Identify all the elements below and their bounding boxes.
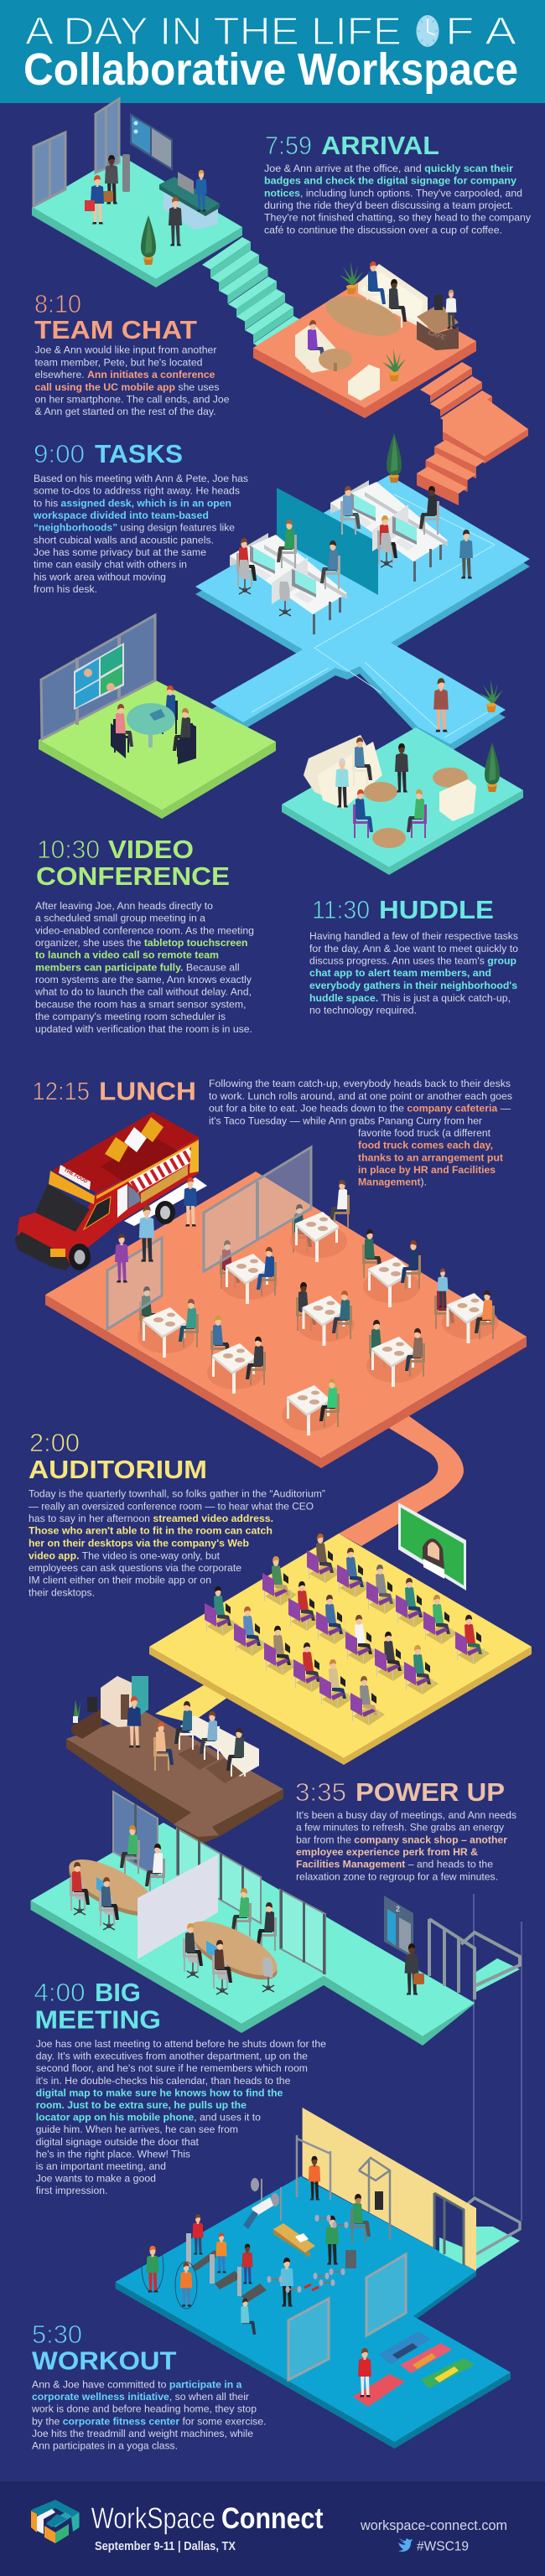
text block: auditorium: Today is the quarterly townhall, so folks gather in the “Auditorium”	[29, 1488, 325, 1500]
door frames	[429, 1919, 520, 1999]
heading: 10:30 Video Conference: VIDEO	[108, 835, 194, 864]
text block: video conference: organizer, she uses the tabletop touchscreen	[35, 937, 248, 949]
heading: 11:30 Huddle	[312, 895, 494, 924]
heading: 9:00 Tasks: TASKS	[95, 439, 183, 468]
text block: huddle: discuss progress. Ann uses the team's group	[309, 955, 516, 967]
text block: video conference: what to do to launch the call without delay. And,	[34, 986, 252, 998]
awning stripes	[128, 1146, 199, 1192]
truck side body	[63, 1137, 199, 1251]
pull-up bar and athlete	[297, 2135, 330, 2200]
text block: auditorium: has to say in her afternoon streamed video address.	[29, 1513, 273, 1524]
text block: video conference: video-enabled conference room. As the meeting	[35, 924, 254, 936]
text block: workout: Joe hits the treadmill and weight machines, while	[32, 2428, 253, 2439]
dividing partition	[138, 1854, 218, 1959]
white door	[117, 1184, 127, 1218]
text block: video conference: room systems are the same, Ann knows exactly	[35, 974, 252, 985]
cafe counter	[417, 290, 459, 350]
huddle scene: mint floor	[282, 727, 523, 875]
heading: 3:35 Power Up: 3:35	[295, 1777, 346, 1807]
wordmark: WorkSpace	[91, 2502, 215, 2535]
title line: A Day in the Life of a	[25, 9, 516, 53]
text block: big meeting: it's in. He double-checks his calendar, than heads to the	[36, 2075, 291, 2087]
text block: big meeting: he's in the right place. Whew! This	[36, 2148, 190, 2160]
text block: arrival: Joe & Ann arrive at the office, and quickly scan their	[264, 163, 513, 174]
text block: big meeting: guide him. When he arrives, he can see from	[36, 2123, 238, 2135]
text block: power up	[296, 1809, 516, 1882]
truck roof	[52, 1112, 199, 1192]
icon: clock as O	[416, 15, 439, 47]
text block: big meeting: Joe wants to make a good	[36, 2173, 156, 2185]
roof vents	[105, 1137, 128, 1162]
heading: 11:30 Huddle: 11:30	[312, 895, 370, 924]
text block: big meeting: second floor, and he's not sure if he remembers which room	[36, 2062, 308, 2074]
heading: 10:30 Video Conference: 10:30	[37, 835, 100, 864]
text block: workout: Ann & Joe have committed to participate in a	[32, 2378, 242, 2390]
text block: power up: a few minutes to refresh. She grabs an energy	[296, 1822, 505, 1834]
text block: lunch: Following the team catch-up, everybody heads back to their desks	[209, 1078, 511, 1089]
text block: video conference: to launch a video call so remote team	[35, 949, 219, 961]
text block: team chat	[35, 344, 230, 417]
text block: tasks: short cubical walls and acoustic panels.	[34, 534, 214, 546]
text block: video conference: After leaving Joe, Ann heads directly to	[35, 900, 213, 912]
text block: team chat: Joe & Ann would like input from another	[35, 344, 216, 356]
text block: lunch: food truck comes each day,	[358, 1140, 493, 1151]
wheels	[69, 1244, 91, 1270]
text block: tasks: Based on his meeting with Ann & Pete, Joe has	[34, 473, 248, 484]
text block: big meeting: is an important meeting, and	[36, 2160, 166, 2172]
text block: lunch: out for a bite to eat. Joe heads down to the company cafeteria —	[209, 1103, 511, 1115]
people at food truck	[115, 1177, 197, 1282]
text block: big meeting: room. Just to be extra sure, he pulls up the	[36, 2099, 247, 2111]
text block: video conference: updated with verification that the room is in use.	[35, 1023, 252, 1035]
food truck	[14, 1112, 207, 1270]
plant	[141, 215, 156, 265]
text block: lunch: it's Taco Tuesday — while Ann grabs Panang Curry from her	[209, 1115, 482, 1126]
heading: 5:30 Workout	[32, 2320, 177, 2376]
text block: auditorium: — really an oversized conference room — to hear what the CEO	[29, 1500, 314, 1512]
glass walls	[107, 1147, 311, 1329]
text block: team chat: & Ann get started on the rest of the day.	[35, 406, 216, 417]
text block: team chat: team member, Pete, but he's located	[35, 357, 203, 369]
heading: 5:30 Workout: 5:30	[32, 2320, 82, 2349]
service counter	[124, 1177, 207, 1226]
icon: WorkSpace Connect logo	[31, 2500, 79, 2543]
plant on corridor	[480, 680, 503, 712]
windshield	[35, 1184, 90, 1232]
presentation screen	[398, 1503, 466, 1591]
text block: arrival: notices, including lunch options. They've carpooled, and	[264, 187, 522, 199]
rear yellow panel	[189, 1141, 199, 1173]
text block: big meeting	[36, 2038, 326, 2196]
meeting people	[113, 704, 133, 753]
heading: 9:00 Tasks: 9:00	[34, 439, 85, 468]
oval coffee table	[321, 288, 405, 344]
walking woman	[433, 678, 449, 732]
text block: workout	[31, 2378, 266, 2452]
bench press	[243, 2178, 281, 2229]
beyond-door floor	[475, 1958, 520, 1993]
orange connecting path	[339, 1410, 464, 1546]
glass panels	[288, 2254, 406, 2380]
hood and front	[17, 1213, 75, 1249]
text block: power up: bar from the company snack shop – another	[296, 1834, 507, 1845]
text block: lunch: thanks to an arrangement put	[358, 1151, 503, 1163]
title line: A Day in the Life of a: A DAY IN THE LIFE	[25, 9, 402, 53]
video conference scene: green floor	[39, 615, 276, 819]
icon: twitter bird	[398, 2538, 413, 2552]
heading: 4:00 Big Meeting: MEETING	[35, 2005, 161, 2035]
text block: arrival: badges and check the digital signage for company	[264, 175, 516, 187]
plant	[485, 742, 500, 792]
text block: huddle: everybody gathers in their neighborhood's	[309, 980, 517, 991]
hashtag: #WSC19	[417, 2539, 469, 2554]
text block: auditorium: video app. The video is one-way only, but	[29, 1549, 221, 1561]
elevator shaft lines	[474, 1894, 522, 2221]
fridge and vending machine	[101, 1676, 148, 1727]
text block: big meeting: locator app on his mobile phone, and uses it to	[36, 2112, 261, 2123]
text block: video conference: the company's meeting room scheduler is	[35, 1011, 226, 1022]
beyond-door floor	[466, 2227, 520, 2269]
weight machine and athlete	[350, 2158, 390, 2242]
text block: auditorium: her on their desktops via the company's Web	[29, 1538, 249, 1549]
heading: 2:00 Auditorium: AUDITORIUM	[29, 1455, 207, 1484]
text block: arrival	[264, 163, 532, 235]
stairs down to cafe	[202, 237, 302, 357]
glass table	[127, 703, 175, 747]
heading: 8:10 Team Chat: TEAM CHAT	[34, 315, 197, 344]
second-floor sign: 2	[396, 1905, 400, 1913]
booth tables	[178, 1745, 243, 1783]
teal divider wall	[277, 488, 378, 595]
text block: power up: employee experience perk from HR &	[296, 1846, 478, 1858]
heading: 2:00 Auditorium	[29, 1428, 207, 1484]
text block: huddle: chat app to alert team members, and	[309, 967, 491, 979]
plant	[387, 433, 402, 483]
meeting table A with people	[62, 1825, 165, 1930]
header banner	[0, 0, 545, 103]
big meeting scene: mint floor	[30, 1792, 520, 2046]
door window	[84, 1197, 111, 1229]
footer band	[0, 2481, 545, 2576]
armchair	[439, 779, 476, 821]
huddle people	[335, 737, 427, 838]
cab yellow band and sign	[49, 1171, 95, 1204]
text block: tasks: Joe has some privacy but at the same	[34, 546, 206, 558]
yoga mats and people	[353, 2331, 475, 2407]
text block: auditorium: Those who aren't able to fit in the room can catch	[29, 1525, 272, 1537]
heading: 10:30 Video Conference	[36, 835, 230, 891]
text block: tasks: workspace divided into team-based	[33, 510, 209, 521]
text block: huddle	[309, 930, 518, 1016]
cardio machines	[186, 2214, 267, 2303]
text block: big meeting: first impression.	[36, 2185, 108, 2196]
text block: video conference: a scheduled small group meeting in a	[35, 913, 205, 924]
audience seats	[205, 1534, 490, 1725]
text block: huddle: Having handled a few of their respective tasks	[309, 930, 518, 942]
text block: video conference: members can participate fully. Because all	[35, 961, 240, 973]
text block: huddle: huddle space. This is just a quick catch-up,	[309, 992, 511, 1004]
sofa with two people	[358, 261, 428, 331]
text block: video conference: because the room has a smart sensor system,	[35, 998, 247, 1010]
text block: big meeting: day. It's with executives from another department, up on the	[36, 2051, 308, 2062]
heading: 7:59 Arrival: ARRIVAL	[321, 131, 439, 160]
text block: tasks	[33, 473, 248, 595]
snack counter	[71, 1697, 102, 1739]
reception desk	[159, 170, 220, 246]
heading: 3:35 Power Up	[295, 1777, 505, 1807]
text block: tasks: to his assigned desk, which is in an open	[34, 497, 231, 509]
text block: huddle: for the day, Ann & Joe want to meet quickly to	[309, 943, 518, 954]
text block: auditorium: their desktops.	[29, 1586, 95, 1598]
wordmark	[91, 2502, 324, 2535]
glass walls	[113, 1792, 325, 1974]
text block: arrival: They're not finished chatting, so they head to the company	[264, 212, 532, 224]
heading: 7:59 Arrival	[265, 131, 439, 160]
cream couch	[304, 735, 382, 809]
text block: workout: work is done and before heading home, they stop	[31, 2403, 257, 2415]
heading: 12:15 Lunch: 12:15	[32, 1077, 90, 1106]
armchairs with woman	[295, 320, 406, 401]
text block: team chat: call using the UC mobile app she uses	[35, 381, 220, 393]
heading: 9:00 Tasks	[34, 439, 183, 468]
food truck: THE FOOD	[63, 1168, 89, 1185]
text block: power up: Facilities Management – and heads to the	[296, 1859, 493, 1870]
text block: power up: It's been a busy day of meetings, and Ann needs	[296, 1809, 516, 1821]
plants	[340, 261, 363, 294]
conference chairs	[111, 722, 196, 764]
joe walking	[405, 1943, 424, 1995]
yellow corridor	[155, 1680, 233, 1723]
text block: arrival: café to continue the discussion over a cup of coffee.	[264, 224, 502, 235]
cafe scene: orange floor and stairs	[253, 261, 528, 505]
badge scanner post	[122, 154, 130, 192]
text block: tasks: “neighborhoods” using design features like	[34, 522, 235, 534]
heading: 10:30 Video Conference: CONFERENCE	[36, 861, 230, 891]
text block: lunch: to work. Lunch rolls around, and at one point or another each goes	[209, 1090, 512, 1102]
heading: 8:10 Team Chat	[34, 289, 197, 344]
website: workspace-connect.com	[360, 2517, 507, 2533]
coffee tables	[364, 768, 468, 848]
orange stair overlap	[417, 467, 467, 505]
wordmark: Connect	[221, 2502, 324, 2535]
text block: workout: Ann participates in a yoga class.	[32, 2440, 178, 2452]
ann	[158, 685, 178, 734]
snack people	[127, 1696, 247, 1777]
heading: 2:00 Auditorium: 2:00	[29, 1428, 80, 1457]
dumbbell rack	[304, 2250, 356, 2290]
text block: team chat: on her smartphone. The call ends, and Joe	[35, 394, 230, 406]
jump-rope athletes	[142, 2242, 197, 2309]
wooden bench	[273, 2223, 315, 2258]
event dates: September 9-11 | Dallas, TX	[95, 2539, 236, 2553]
heading: 7:59 Arrival: 7:59	[265, 131, 312, 160]
text block: lunch: Management).	[358, 1177, 427, 1188]
workout scene: blue gym floor	[116, 2108, 520, 2449]
dining tables and people	[138, 1180, 498, 1435]
text block: workout: corporate wellness initiative, so when all their	[32, 2391, 249, 2403]
text block: lunch: in place by HR and Facilities	[358, 1164, 496, 1176]
text block: lunch: favorite food truck (a different	[358, 1127, 491, 1139]
text block: auditorium: IM client either on their mobile app or on	[29, 1575, 211, 1586]
heading: 8:10 Team Chat: 8:10	[34, 289, 81, 318]
dumbbell athletes	[239, 2215, 349, 2340]
heading: 5:30 Workout: WORKOUT	[32, 2346, 177, 2376]
heading: 4:00 Big Meeting	[34, 1978, 161, 2035]
meeting table B with people	[182, 1888, 284, 1994]
text block: tasks: from his desk.	[34, 583, 97, 595]
door frames	[34, 99, 119, 206]
standing man	[459, 530, 473, 578]
text block: huddle: no technology required.	[309, 1004, 417, 1016]
lunch scene: cafeteria floor and path	[14, 1112, 527, 1546]
title line: A Day in the Life of a: F A	[445, 9, 516, 53]
text block: workout: by the corporate fitness center for some exercise.	[32, 2415, 267, 2427]
text block: team chat: elsewhere. Ann initiates a conference	[35, 369, 215, 380]
text block: tasks: some to-dos to address right away. He heads	[34, 485, 240, 497]
text block: big meeting: digital map to make sure he knows how to find the	[36, 2087, 283, 2098]
doorway in wall	[434, 2193, 464, 2265]
wall with screen	[41, 615, 155, 739]
text block: big meeting: Joe has one last meeting to attend before he shuts down for the	[36, 2038, 326, 2050]
power up scene: brown snack floor	[66, 1676, 283, 1845]
text block: auditorium	[29, 1488, 325, 1598]
text block: arrival: during the ride they'd been discussing a team project.	[264, 199, 513, 211]
heading: 12:15 Lunch	[32, 1077, 196, 1106]
yellow back wall	[303, 2108, 476, 2271]
arrival scene: mint lobby floor	[32, 99, 302, 357]
text block: lunch	[209, 1078, 512, 1188]
auditorium scene: yellow floor	[149, 1503, 532, 1765]
heading: 4:00 Big Meeting: BIG	[95, 1978, 141, 2007]
text block: auditorium: employees can ask questions via the corporate	[29, 1562, 241, 1574]
people in lobby	[85, 155, 118, 225]
desk cluster lower	[230, 520, 347, 634]
heading: 3:35 Power Up: POWER UP	[356, 1777, 505, 1807]
text block: big meeting: digital signage outside the door that	[36, 2136, 200, 2148]
text block: power up: relaxation zone to regroup for a few minutes.	[296, 1870, 498, 1882]
heading: 12:15 Lunch: LUNCH	[99, 1077, 196, 1106]
desk cluster upper	[330, 480, 448, 582]
workspace scene: blue floor with corridors	[195, 433, 530, 752]
text block: video conference	[34, 900, 254, 1035]
digital signage	[130, 113, 173, 171]
text block: tasks: his work area without moving	[34, 571, 166, 582]
heading: 4:00 Big Meeting: 4:00	[34, 1978, 86, 2007]
orange stairs to desks	[417, 362, 528, 505]
cafe counter: CAFE	[427, 328, 446, 341]
heading: 11:30 Huddle: HUDDLE	[379, 895, 494, 924]
service window	[128, 1186, 141, 1208]
text block: tasks: time can easily chat with others in	[34, 559, 187, 571]
booth seating	[180, 1715, 259, 1777]
second-floor sign	[384, 1896, 413, 1958]
